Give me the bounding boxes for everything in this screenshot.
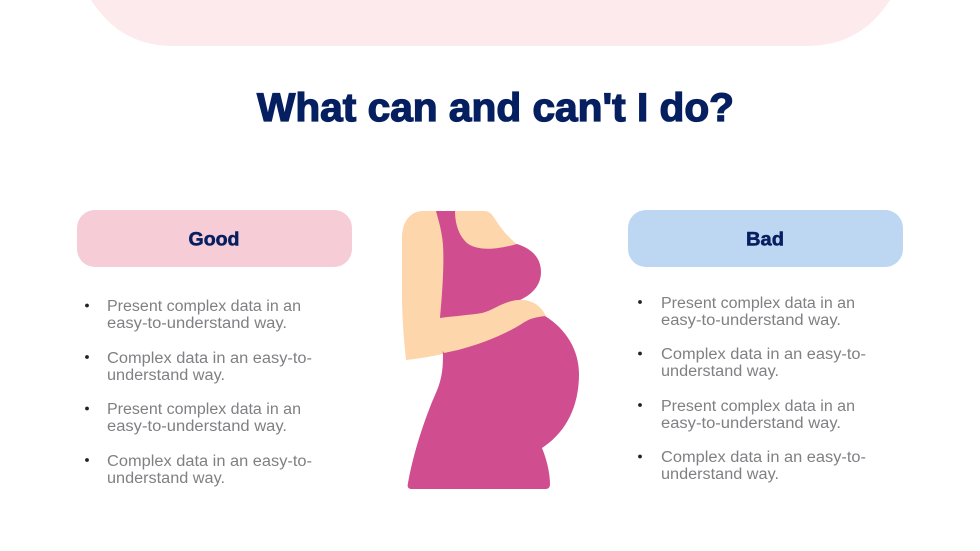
good item 3 <box>85 401 301 435</box>
bad item 3: easy-to-understand way. <box>661 415 841 432</box>
bad item 1: Present complex data in an <box>661 295 855 312</box>
forearm and hand <box>430 300 546 353</box>
good item 1: Present complex data in an <box>107 298 301 315</box>
good item 1 <box>85 298 301 332</box>
good item 2: understand way. <box>107 367 225 384</box>
bad item 3 <box>638 398 855 432</box>
panel: bad <box>628 210 903 483</box>
bad item 4 <box>638 449 866 483</box>
good item 3: easy-to-understand way. <box>107 418 287 435</box>
good item 2: Complex data in an easy-to- <box>107 350 312 367</box>
good header: Good <box>188 230 240 250</box>
skin: shoulder, chest and upper arm <box>402 211 518 360</box>
bad item 1 <box>638 295 855 329</box>
bad item 2 <box>638 346 866 380</box>
dress <box>408 211 579 489</box>
good item 4 <box>85 453 312 487</box>
good item 4: understand way. <box>107 470 225 487</box>
bad header: Bad <box>746 230 784 250</box>
title: What can and can't I do? <box>257 86 734 130</box>
good item 1: easy-to-understand way. <box>107 315 287 332</box>
bad item 3: Present complex data in an <box>661 398 855 415</box>
good item 2 <box>85 350 312 384</box>
good item 3: Present complex data in an <box>107 401 301 418</box>
top decorative banner <box>91 0 890 46</box>
bad item 1: easy-to-understand way. <box>661 312 841 329</box>
illustration: pregnant woman <box>402 211 579 489</box>
good item 4: Complex data in an easy-to- <box>107 453 312 470</box>
panel: good <box>77 210 352 487</box>
good header <box>77 210 352 267</box>
bad header <box>628 210 903 267</box>
bad item 2: understand way. <box>661 363 779 380</box>
bad item 4: understand way. <box>661 466 779 483</box>
bad item 4: Complex data in an easy-to- <box>661 449 866 466</box>
bad item 2: Complex data in an easy-to- <box>661 346 866 363</box>
